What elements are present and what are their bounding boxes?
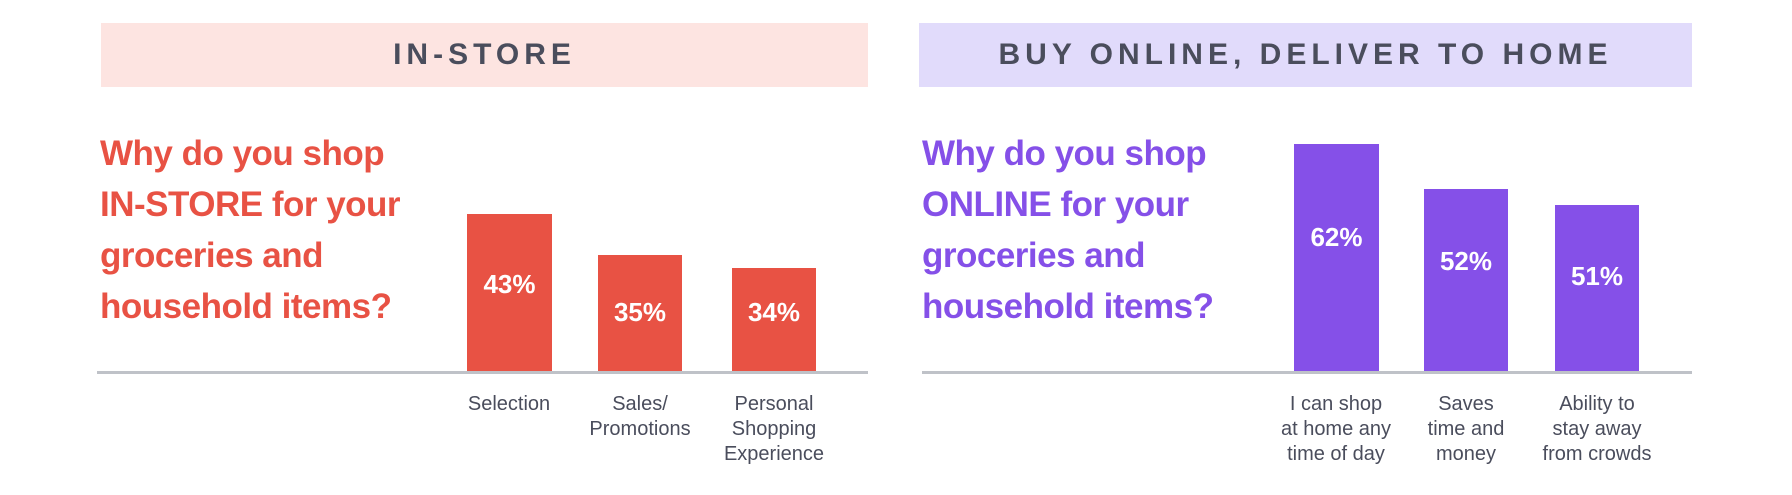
question: online: groceries and	[922, 236, 1145, 275]
label: selection: Selection	[468, 393, 550, 415]
question: in-store: groceries and	[100, 236, 323, 275]
bar: saves time 52%: 52%	[1440, 246, 1492, 276]
header: in-store	[101, 23, 868, 87]
bar: sales 35%	[598, 255, 682, 371]
question: in-store: household items?	[100, 287, 391, 326]
bar: personal 34%	[732, 268, 816, 371]
question: in-store: IN-STORE for your	[100, 185, 400, 224]
baseline right	[922, 371, 1692, 374]
question: in-store	[100, 134, 400, 326]
header: online	[919, 23, 1692, 87]
label: shop any time: time of day	[1287, 443, 1385, 465]
bar: shop any time 62%: 62%	[1310, 222, 1363, 252]
question: online	[922, 134, 1213, 326]
bar: selection 43%	[467, 214, 552, 371]
bar: crowds 51%: 51%	[1571, 261, 1623, 291]
bar: shop any time 62%	[1294, 144, 1379, 371]
bar: personal 34%: 34%	[748, 297, 800, 327]
label: sales: Sales/	[612, 393, 668, 415]
header: in-store: IN-STORE	[393, 38, 576, 71]
label: saves time: Saves	[1438, 393, 1494, 415]
label: saves time	[1428, 393, 1504, 465]
question: in-store: Why do you shop	[100, 134, 384, 173]
label: saves time: time and	[1428, 418, 1504, 440]
question: online: ONLINE for your	[922, 185, 1189, 224]
label: personal: Experience	[724, 443, 824, 465]
baseline left	[97, 371, 868, 374]
label: shop any time: I can shop	[1290, 393, 1382, 415]
label: crowds: Ability to	[1559, 393, 1635, 415]
bar: selection 43%: 43%	[483, 269, 536, 299]
bar: sales 35%: 35%	[614, 297, 666, 327]
label: personal: Personal	[735, 393, 813, 415]
bar: crowds 51%	[1555, 205, 1639, 371]
label: crowds: from crowds	[1543, 443, 1651, 465]
label: shop any time	[1281, 393, 1391, 465]
label: personal: Shopping	[732, 418, 816, 440]
label: sales	[589, 393, 691, 440]
label: crowds	[1542, 393, 1651, 465]
label: shop any time: at home any	[1281, 418, 1391, 440]
label: personal	[724, 393, 824, 465]
label: sales: Promotions	[589, 418, 691, 440]
label: crowds: stay away	[1553, 418, 1641, 440]
bar: saves time 52%	[1424, 189, 1508, 371]
question: online: Why do you shop	[922, 134, 1206, 173]
header: online: BUY ONLINE, DELIVER TO HOME	[999, 38, 1612, 71]
question: online: household items?	[922, 287, 1213, 326]
label: saves time: money	[1436, 443, 1496, 465]
